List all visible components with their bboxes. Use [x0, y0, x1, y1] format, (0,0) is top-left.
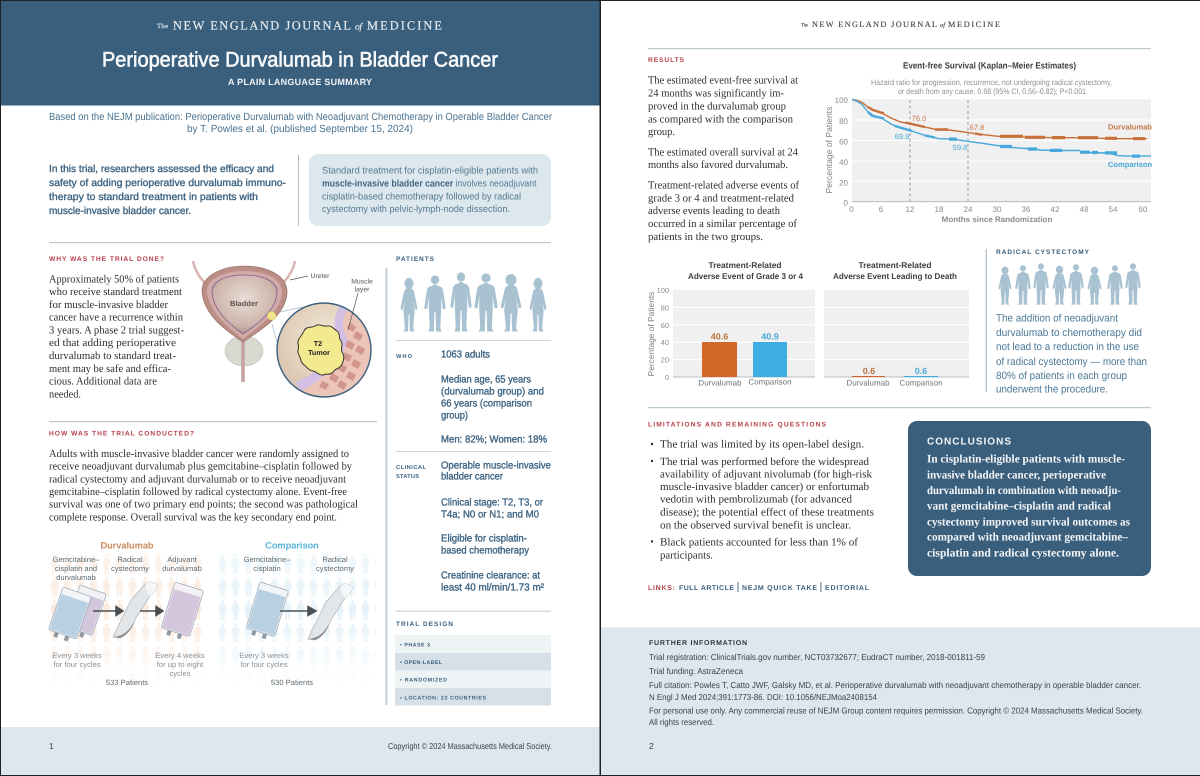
durvalumab arm: cisplatin and — [55, 564, 97, 573]
clinical status: least 40 ml/min/1.73 m² — [441, 582, 545, 594]
paragraph: complete response. Overall survival was the key secondary end point. — [49, 512, 337, 524]
title: Perioperative Durvalumab in Bladder Cancer — [102, 48, 498, 72]
axis labels: 60 — [839, 138, 849, 146]
further information footer: Full citation: Powles T, Catto JWF, Galsky MD, et al. Perioperative durvalumab with neoadjuvant chemotherapy in operable bladder cancer. — [649, 680, 1141, 690]
data labels: 76.0 — [912, 114, 926, 123]
paragraph: gemcitabine–cisplatin followed by radical cystectomy alone. Event-free — [49, 486, 347, 498]
axis labels: 42 — [1051, 205, 1060, 214]
diagram: treatment arms — [47, 540, 376, 687]
page number: 2 — [649, 741, 654, 751]
bullet list: availability of adjuvant nivolumab (for high-risk — [660, 468, 872, 480]
journal masthead: of — [940, 22, 946, 29]
axis labels: Months since Randomization — [942, 215, 1052, 224]
axis labels: 0 — [849, 205, 854, 214]
comparison arm: Gemcitabine– — [244, 555, 291, 564]
text: 80% of patients in each group — [996, 370, 1127, 382]
journal masthead: The — [157, 23, 168, 30]
axis labels: 54 — [1109, 205, 1118, 214]
panel: results text: 24 months was significantly im- — [648, 88, 784, 100]
further information footer: All rights reserved. — [649, 717, 714, 727]
chart: Kaplan-Meier event-free survival: or death from any cause, 0.68 (95% CI, 0.56–0.82); P<0.001 — [898, 87, 1086, 96]
standard treatment callout: cisplatin-based chemotherapy followed by radical — [322, 192, 521, 202]
axis labels: 100 — [835, 96, 849, 105]
chart: Kaplan-Meier event-free survival: Hazard ratio for progression, recurrence, not undergoing radical cystectomy, — [871, 78, 1112, 87]
durvalumab arm: durvalumab — [162, 564, 202, 573]
paragraph: durvalumab to standard treat- — [49, 350, 176, 362]
further information footer: Trial funding: AstraZeneca — [649, 666, 743, 676]
paragraph: Adults with muscle-invasive bladder cancer were randomly assigned to — [49, 448, 349, 460]
panel: how was the trial conducted — [49, 430, 358, 524]
chart: adverse event of grade 3 or 4: Durvalumab — [698, 378, 742, 388]
heading: WHY WAS THE TRIAL DONE? — [49, 256, 164, 263]
journal masthead: The — [801, 22, 808, 28]
illustration: bladder with T2 tumor: Tumor — [308, 348, 330, 357]
heading: RESULTS — [648, 57, 685, 64]
who: 66 years (comparison — [441, 398, 532, 410]
illustration: bladder with T2 tumor: Ureter — [311, 273, 330, 280]
chart: Kaplan-Meier event-free survival — [824, 60, 1153, 224]
axis labels: 6 — [879, 205, 884, 214]
chart: adverse event of grade 3 or 4: 60 — [661, 321, 669, 330]
bullet list: on the observed survival benefit is unclear. — [660, 520, 851, 532]
data labels: 67.8 — [970, 123, 984, 132]
illustration: bladder with T2 tumor: layer — [355, 286, 370, 294]
panel: patients — [395, 256, 551, 706]
conclusions box — [908, 421, 1151, 576]
chart: adverse event of grade 3 or 4: Percentage of Patients — [646, 292, 656, 376]
clinical status: STATUS — [396, 474, 419, 480]
chart title: Event-free Survival (Kaplan–Meier Estimates) — [903, 60, 1076, 70]
illustration: bladder with T2 tumor: Muscle — [351, 278, 373, 286]
panel: results text: Treatment-related adverse events of — [648, 180, 799, 192]
comparison arm: Comparison — [265, 540, 319, 550]
chart: adverse event of grade 3 or 4: 0 — [665, 373, 669, 382]
chart: adverse event leading to death: 0.6 — [863, 366, 875, 376]
further information footer: For personal use only. Any commercial reuse of NEJM Group content requires permission. Copyright © 2024 Massachusetts Medical Society. — [649, 706, 1143, 716]
arrow — [93, 606, 123, 616]
illustration: bladder with T2 tumor — [193, 261, 374, 402]
paragraph: 3 years. A phase 2 trial suggest- — [49, 324, 184, 336]
clinical status — [396, 460, 551, 594]
panel: results text: grade 3 or 4 and treatment-related — [648, 192, 794, 204]
conclusion text: durvalumab in combination with neoadju- — [927, 484, 1121, 497]
paragraph: cious. Additional data are — [49, 376, 157, 388]
data labels: Comparison — [1108, 160, 1153, 169]
comparison arm: cisplatin — [253, 564, 281, 573]
links — [648, 582, 870, 592]
intro statement: muscle-invasive bladder cancer. — [49, 206, 191, 217]
paragraph: for muscle-invasive bladder — [49, 299, 168, 311]
who: (durvalumab group) and — [441, 386, 544, 398]
who: WHO — [396, 354, 413, 360]
clinical status: Clinical stage: T2, T3, or — [441, 498, 544, 508]
header band — [1, 1, 600, 106]
chart: adverse event of grade 3 or 4: 40.6 — [711, 332, 728, 342]
links: LINKS: — [648, 585, 675, 592]
illustration: bladder with T2 tumor: Bladder — [230, 299, 258, 308]
durvalumab arm: Gemcitabine– — [53, 555, 100, 564]
axis labels: 60 — [1139, 205, 1148, 214]
further information footer: N Engl J Med 2024;391:1773-86. DOI: 10.1056/NEJMoa2408154 — [649, 692, 877, 702]
clinical status: CLINICAL — [396, 465, 427, 471]
chart: adverse event leading to death: 0.6 — [915, 366, 927, 376]
chart: adverse event of grade 3 or 4: 100 — [657, 286, 669, 295]
bullet list: muscle-invasive bladder cancer) or enfortumab — [660, 481, 869, 493]
standard treatment callout: cystectomy with pelvic-lymph-node dissection. — [322, 204, 510, 215]
icon: blue infusion bag — [245, 582, 289, 641]
durvalumab arm: cystectomy — [111, 564, 149, 573]
journal masthead: MEDICINE — [948, 20, 1000, 29]
durvalumab arm: for up to eight — [157, 660, 204, 669]
heading: PATIENTS — [396, 256, 435, 263]
heading: HOW WAS THE TRIAL CONDUCTED? — [49, 430, 194, 438]
durvalumab arm: Durvalumab — [100, 540, 154, 550]
arrow — [280, 606, 316, 616]
who — [396, 350, 547, 446]
further information footer: Trial registration: ClinicalTrials.gov number, NCT03732677; EudraCT number, 2018-001811-59 — [649, 652, 985, 662]
panel: radical cystectomy — [996, 249, 1147, 396]
axis labels: 0 — [844, 198, 849, 208]
durvalumab arm: durvalumab — [56, 573, 96, 582]
chart: adverse event of grade 3 or 4 — [646, 260, 815, 388]
chart: adverse event of grade 3 or 4: 40.9 — [761, 332, 779, 342]
intro statement: therapy to standard treatment in patients with — [49, 192, 258, 203]
panel: results text: patients in the two groups. — [648, 231, 763, 243]
text: underwent the procedure. — [996, 384, 1108, 396]
durvalumab arm: 533 Patients — [106, 678, 148, 687]
panel: results text: proved in the durvalumab group — [648, 100, 786, 112]
links: EDITORIAL — [825, 585, 870, 592]
text: not lead to a reduction in the use — [996, 341, 1139, 353]
paragraph: needed. — [49, 388, 81, 400]
panel: results text: months also favored durvalumab. — [648, 159, 788, 171]
illustration: bladder with T2 tumor: T2 — [314, 339, 322, 348]
who: Median age, 65 years — [441, 374, 531, 386]
bullet list: participants. — [660, 550, 713, 562]
trial design: • PHASE 3 — [400, 642, 430, 648]
data labels: Durvalumab — [1108, 122, 1152, 132]
icon: purple infusion bag — [64, 585, 106, 640]
durvalumab arm: Radical — [117, 555, 143, 564]
chart: adverse event of grade 3 or 4: Comparison — [748, 378, 792, 386]
text: durvalumab to chemotherapy did — [996, 327, 1142, 339]
source citation — [49, 112, 552, 135]
panel: results text — [648, 57, 799, 243]
axis labels — [824, 96, 1148, 224]
panel: results text: occurred in a similar percentage of — [648, 218, 797, 230]
chart: adverse event of grade 3 or 4: Treatment-Related — [708, 260, 782, 270]
footer left — [1, 727, 600, 775]
panel: results text: adverse events leading to death — [648, 205, 780, 217]
chart: adverse event of grade 3 or 4: 80 — [661, 304, 669, 312]
links: FULL ARTICLE — [679, 585, 734, 592]
durvalumab arm: for four cycles — [53, 660, 101, 669]
comparison arm: 530 Patients — [271, 678, 313, 687]
axis labels: 36 — [1022, 205, 1031, 214]
clinical status: Eligible for cisplatin- — [441, 534, 527, 544]
comparison arm: cystectomy — [316, 564, 354, 573]
panel: results text: as compared with the comparison — [648, 114, 793, 126]
paragraph: survival was one of two primary end points; the second was pathological — [49, 498, 358, 510]
source citation: Based on the NEJM publication: Perioperative Durvalumab with Neoadjuvant Chemotherapy in Operable Bladder Cancer — [49, 112, 552, 123]
axis labels: 48 — [1080, 205, 1089, 214]
panel: results text: The estimated overall survival at 24 — [648, 146, 798, 158]
durvalumab curve — [852, 99, 1147, 139]
heading: FURTHER INFORMATION — [649, 640, 747, 647]
left page — [1, 1, 600, 775]
bar: durvalumab — [702, 342, 737, 377]
heading: LIMITATIONS AND REMAINING QUESTIONS — [648, 422, 827, 428]
durvalumab arm: Every 4 weeks — [155, 651, 205, 660]
intro statement: In this trial, researchers assessed the efficacy and — [49, 164, 274, 175]
chart: adverse event of grade 3 or 4: Adverse Event of Grade 3 or 4 — [688, 271, 803, 281]
icon: patient silhouettes — [401, 272, 546, 332]
data labels: 59.8 — [953, 143, 967, 152]
axis labels: 18 — [935, 205, 944, 214]
comparison arm — [239, 540, 354, 687]
intro statement — [49, 164, 286, 217]
durvalumab arm: Adjuvant — [167, 555, 198, 564]
bullet list: disease); the potential effect of these treatments — [660, 506, 874, 518]
clinical status: bladder cancer — [441, 472, 504, 482]
data labels — [895, 114, 1153, 169]
further information footer — [601, 628, 1200, 775]
axis labels: Percentage of Patients — [824, 107, 834, 193]
bullet list: Black patients accounted for less than 1% of — [660, 536, 858, 548]
panel: limitations — [648, 422, 874, 592]
bullet list — [651, 438, 874, 562]
paragraph — [49, 448, 358, 524]
journal masthead: of — [355, 22, 363, 32]
panel: results text: The estimated event-free survival at — [648, 74, 798, 86]
durvalumab arm: Every 3 weeks — [52, 651, 102, 660]
heading: CONCLUSIONS — [927, 436, 1011, 448]
chart: adverse event leading to death — [824, 260, 969, 388]
paragraph — [49, 274, 184, 400]
paragraph: ment may be safe and effica- — [49, 363, 171, 375]
axis labels: 20 — [839, 178, 849, 188]
text: The addition of neoadjuvant — [996, 312, 1118, 324]
standard treatment callout — [309, 154, 551, 226]
axis labels: 30 — [993, 205, 1002, 214]
durvalumab arm — [47, 540, 205, 687]
comparison arm: for four cycles — [240, 660, 288, 669]
axis labels: 12 — [906, 205, 915, 214]
bar: comparison — [753, 342, 787, 377]
durvalumab arm: cycles — [169, 669, 191, 678]
journal masthead: NEW ENGLAND JOURNAL — [812, 20, 937, 29]
axis labels: 24 — [964, 205, 973, 214]
journal masthead: MEDICINE — [367, 18, 442, 32]
data labels: 69.9 — [895, 132, 909, 141]
standard treatment callout: muscle-invasive bladder cancer involves neoadjuvant — [322, 178, 537, 190]
paragraph: receive neoadjuvant durvalumab plus gemcitabine–cisplatin followed by — [49, 460, 352, 472]
panel: why was the trial done — [49, 256, 374, 402]
standard treatment callout: Standard treatment for cisplatin-eligible patients with — [322, 166, 538, 176]
trial design: • LOCATION: 22 COUNTRIES — [400, 696, 486, 702]
panel: results text: group. — [648, 126, 675, 138]
axis labels: 40 — [839, 158, 849, 167]
source citation: by T. Powles et al. (published September 15, 2024) — [187, 124, 413, 135]
conclusion text: compared with neoadjuvant gemcitabine– — [927, 530, 1128, 544]
footer left: Copyright © 2024 Massachusetts Medical Society. — [388, 741, 552, 751]
paragraph: radical cystectomy and adjuvant durvalumab or to receive neoadjuvant — [49, 474, 346, 486]
conclusion text — [927, 452, 1130, 560]
comparison arm: Radical — [322, 555, 348, 564]
footer left: 1 — [49, 741, 54, 751]
text — [996, 312, 1147, 396]
who: Men: 82%; Women: 18% — [441, 434, 547, 446]
chart: adverse event leading to death: Durvalumab — [846, 378, 890, 388]
bullet list: The trial was performed before the widespread — [660, 456, 870, 468]
bullet list: The trial was limited by its open-label design. — [660, 438, 864, 450]
chart: adverse event leading to death: Comparison — [899, 378, 943, 388]
icon: scalpel — [308, 584, 352, 640]
arrow — [140, 606, 163, 616]
paragraph: cancer have a recurrence within — [49, 312, 183, 324]
trial design — [395, 621, 551, 706]
conclusion text: In cisplatin-eligible patients with muscle- — [927, 452, 1125, 466]
who: 1063 adults — [441, 350, 490, 360]
conclusion text: cystectomy improved survival outcomes as — [927, 516, 1130, 528]
chart: adverse event leading to death: Adverse Event Leading to Death — [833, 271, 957, 281]
clinical status: Creatinine clearance: at — [441, 570, 540, 582]
who: group) — [441, 410, 468, 422]
chart: adverse event leading to death: Treatment-Related — [858, 260, 932, 270]
clinical status: Operable muscle-invasive — [441, 460, 551, 472]
chart: adverse event of grade 3 or 4: 40 — [661, 338, 669, 347]
comparison curve — [852, 99, 1151, 156]
icon: blue infusion bag — [47, 587, 91, 644]
trial design: TRIAL DESIGN — [396, 621, 453, 628]
paragraph: who receive standard treatment — [49, 286, 182, 298]
conclusion text: vant gemcitabine–cisplatin and radical — [927, 500, 1112, 512]
trial design: • RANDOMIZED — [400, 678, 447, 684]
journal masthead: NEW ENGLAND JOURNAL — [173, 18, 351, 32]
links: NEJM QUICK TAKE — [742, 585, 817, 592]
trial design: • OPEN-LABEL — [400, 660, 443, 666]
comparison arm: Every 3 weeks — [239, 651, 289, 660]
conclusion text: cisplatin and radical cystectomy alone. — [927, 546, 1119, 560]
paragraph: Approximately 50% of patients — [49, 274, 179, 286]
intro statement: safety of adding perioperative durvalumab immuno- — [49, 178, 286, 189]
right page — [601, 1, 1200, 775]
heading: RADICAL CYSTECTOMY — [996, 249, 1090, 256]
paragraph: ed that adding perioperative — [49, 337, 176, 349]
subtitle: A PLAIN LANGUAGE SUMMARY — [228, 77, 372, 87]
journal masthead — [157, 18, 442, 32]
bullet list: vedotin with pembrolizumab (for advanced — [660, 494, 852, 506]
axis labels: 80 — [839, 117, 849, 126]
icon: adjuvant bag — [160, 582, 204, 641]
icon: patient silhouettes — [999, 263, 1141, 305]
conclusion text: invasive bladder cancer, perioperative — [927, 468, 1106, 482]
icon: scalpel — [113, 582, 157, 638]
clinical status: T4a; N0 or N1; and M0 — [441, 510, 539, 520]
journal masthead — [801, 20, 1000, 29]
text: of radical cystectomy — more than — [996, 356, 1147, 368]
clinical status: based chemotherapy — [441, 546, 530, 556]
chart: adverse event of grade 3 or 4: 20 — [661, 356, 669, 364]
